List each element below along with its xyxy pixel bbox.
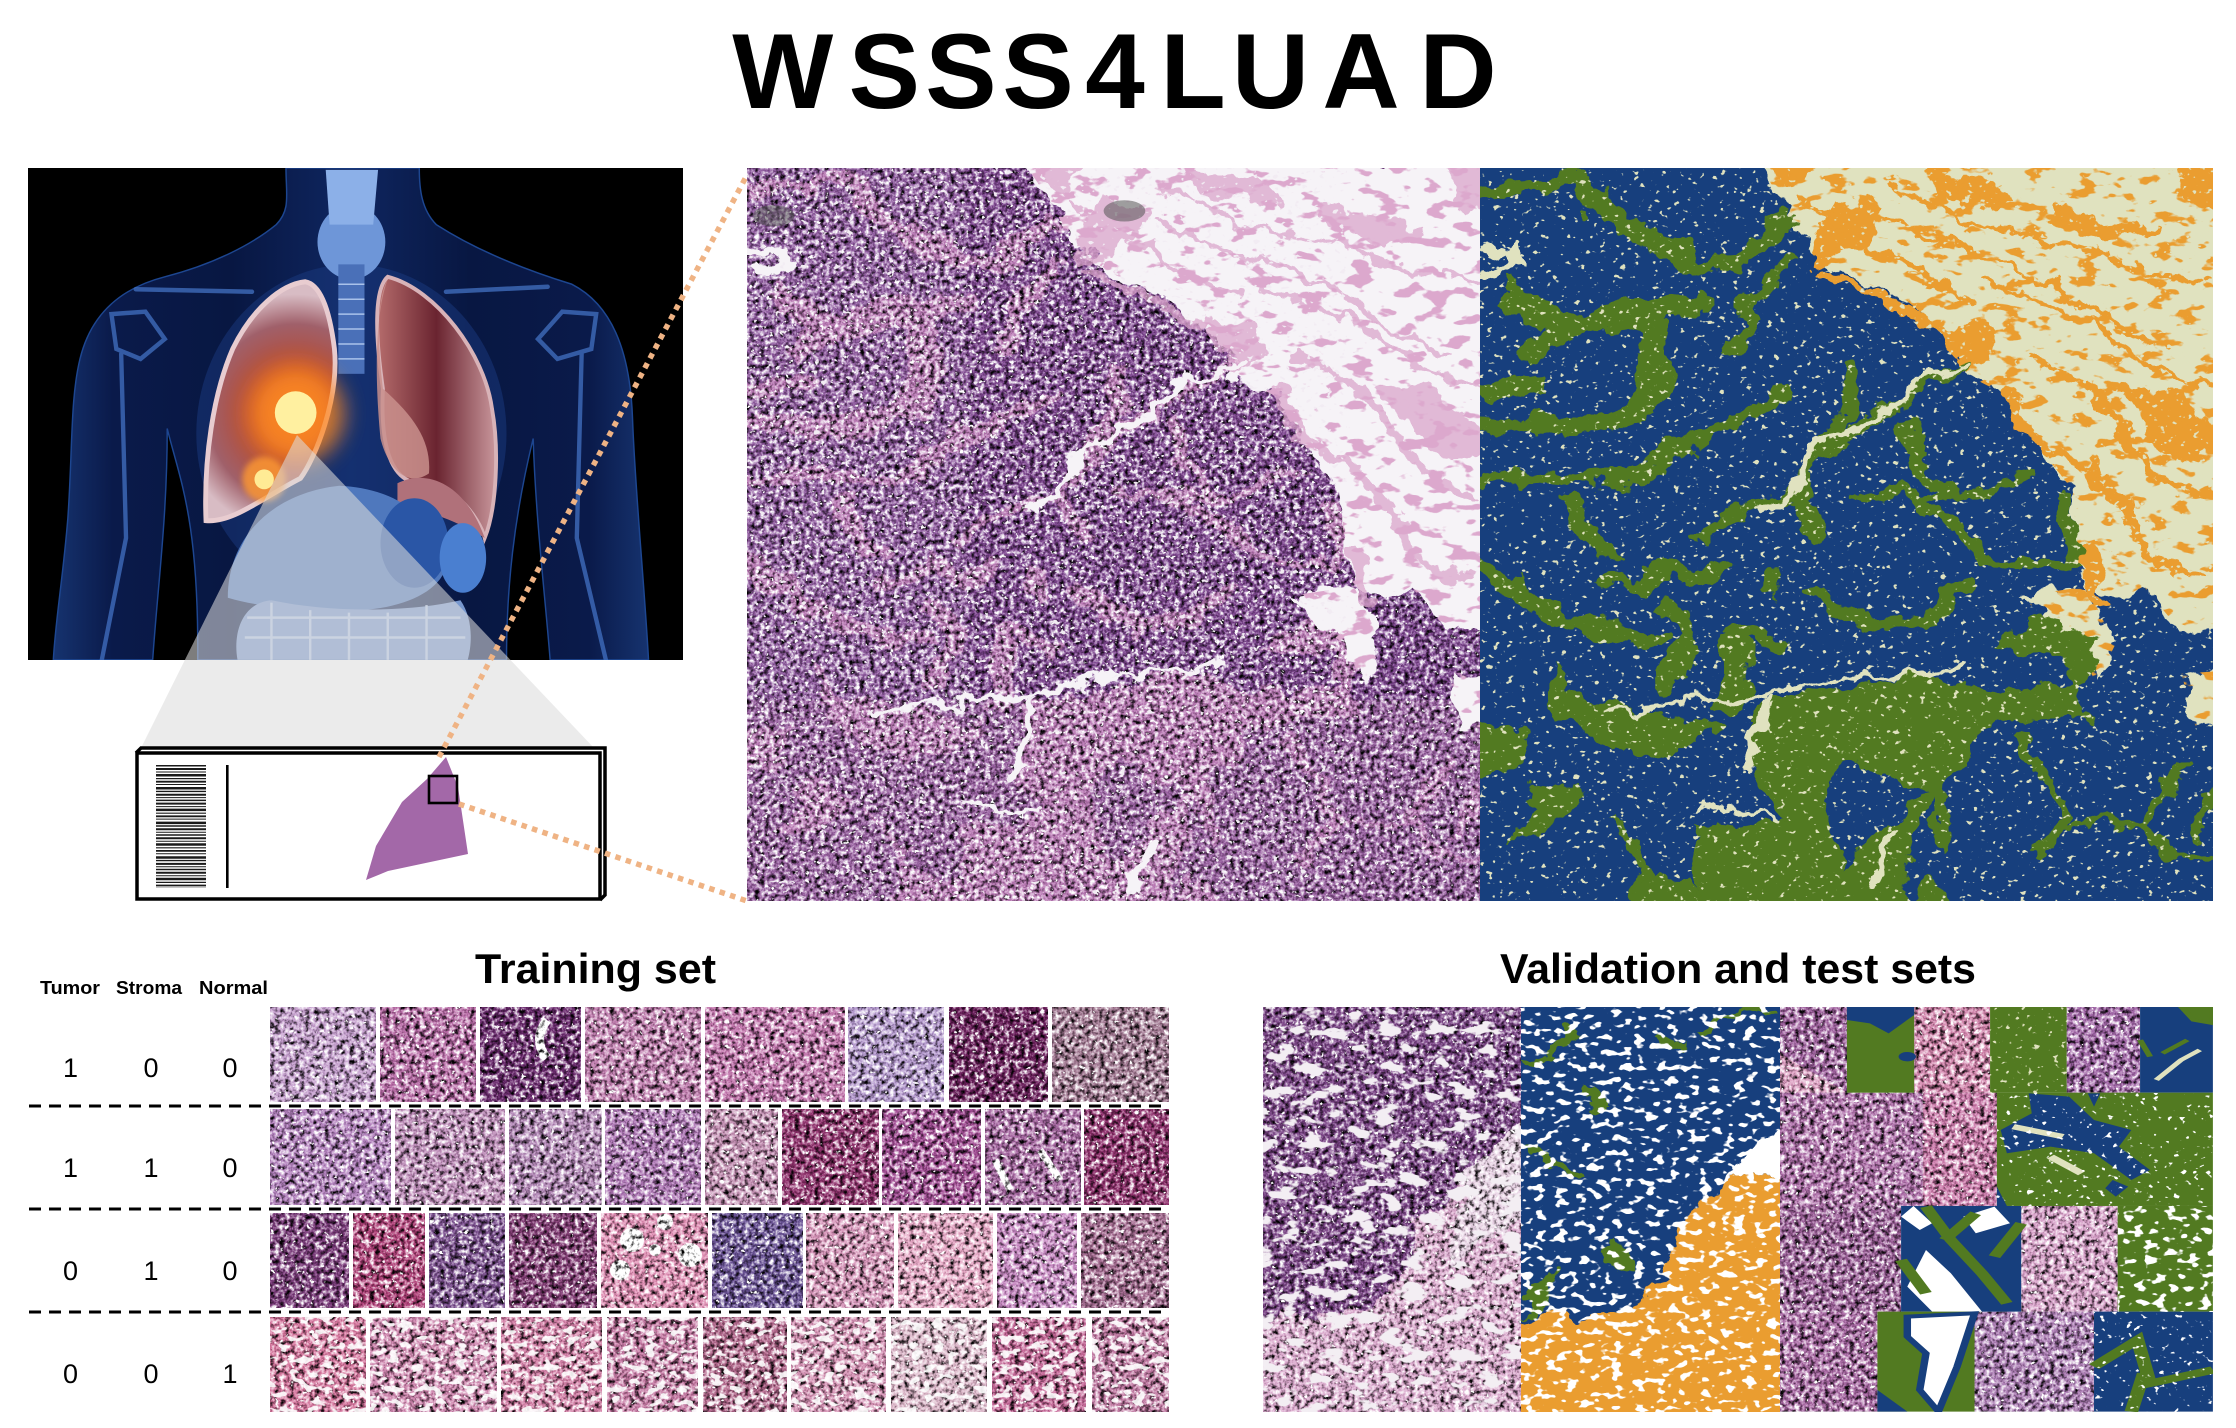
ribcage halo xyxy=(196,266,506,550)
label matrix digits: 1 xyxy=(63,1053,78,1083)
row four xyxy=(270,1317,1169,1412)
diaphragm dome xyxy=(397,478,485,538)
body silhouette xyxy=(53,168,649,660)
panel: validation and test image pairs mosaic xyxy=(1780,1007,2213,1412)
crop D2 mask xyxy=(2094,1312,2213,1412)
panel: H&E tissue image xyxy=(728,160,1515,916)
whole-slide diagram xyxy=(136,748,605,900)
heading: training set: Training set xyxy=(475,945,716,992)
heading: validation and test sets: Validation and test sets xyxy=(1500,945,1976,992)
H&E crops xyxy=(1780,1007,2140,1412)
label matrix column headers: Stroma xyxy=(116,978,183,998)
neck and airway xyxy=(317,170,385,374)
label matrix digits: 0 xyxy=(143,1359,159,1389)
row four air spaces xyxy=(270,1317,1169,1412)
label matrix digits: 0 xyxy=(143,1053,159,1083)
title: WSSS4LUAD xyxy=(732,11,1497,131)
pale lobe xyxy=(377,279,429,478)
speckle on masks xyxy=(1990,1007,2213,1412)
label matrix digits: 0 xyxy=(222,1053,238,1083)
row one xyxy=(270,1007,1169,1102)
slide frame xyxy=(136,748,605,900)
tissue section on the slide xyxy=(366,757,468,880)
shoulder bones xyxy=(102,287,606,660)
inset marker box xyxy=(429,776,457,803)
label matrix digits: 0 xyxy=(222,1256,238,1286)
lung, image left xyxy=(206,282,335,521)
crop B mask xyxy=(1997,1093,2213,1206)
training thumbnails grid xyxy=(270,1007,1169,1412)
segmentation crops xyxy=(1847,1007,2213,1412)
label matrix column headers xyxy=(40,978,268,998)
label matrix column headers: Tumor xyxy=(40,978,100,998)
label matrix digits: 1 xyxy=(143,1256,159,1286)
lung, image right xyxy=(377,277,496,538)
label matrix column headers: Normal xyxy=(199,978,268,998)
crop A3 mask xyxy=(2140,1007,2213,1093)
abdominal organs xyxy=(228,486,486,660)
dotted zoom connector lines xyxy=(439,175,747,901)
crop C2 mask xyxy=(2118,1206,2213,1312)
panel: validation H&E image xyxy=(1263,1007,1521,1412)
label matrix digits: 0 xyxy=(222,1153,238,1183)
crop D1 mask xyxy=(1877,1312,1975,1412)
translucent projection cone from lung to slide xyxy=(141,435,594,748)
label matrix digits: 1 xyxy=(222,1359,238,1389)
panel: segmentation mask xyxy=(1461,160,2236,916)
anatomy illustration: lungs with tumour xyxy=(28,168,683,660)
row two xyxy=(270,1109,1169,1205)
divider bar xyxy=(226,765,229,888)
crop A1 mask xyxy=(1847,1007,1916,1093)
label matrix digits: 1 xyxy=(63,1153,78,1183)
row three xyxy=(270,1213,1169,1308)
label matrix digits: 0 xyxy=(63,1256,78,1286)
barcode xyxy=(156,765,206,888)
label matrix digits: 0 xyxy=(63,1359,78,1389)
crop A2 mask xyxy=(1990,1007,2067,1093)
dashed row separators xyxy=(29,1106,1169,1312)
label matrix digits: 1 xyxy=(143,1153,159,1183)
panel: validation segmentation mask xyxy=(1521,1007,1780,1412)
crop C1 mask xyxy=(1901,1206,2021,1312)
label matrix digits xyxy=(63,1053,238,1389)
tumour glow and nodules xyxy=(242,364,344,502)
